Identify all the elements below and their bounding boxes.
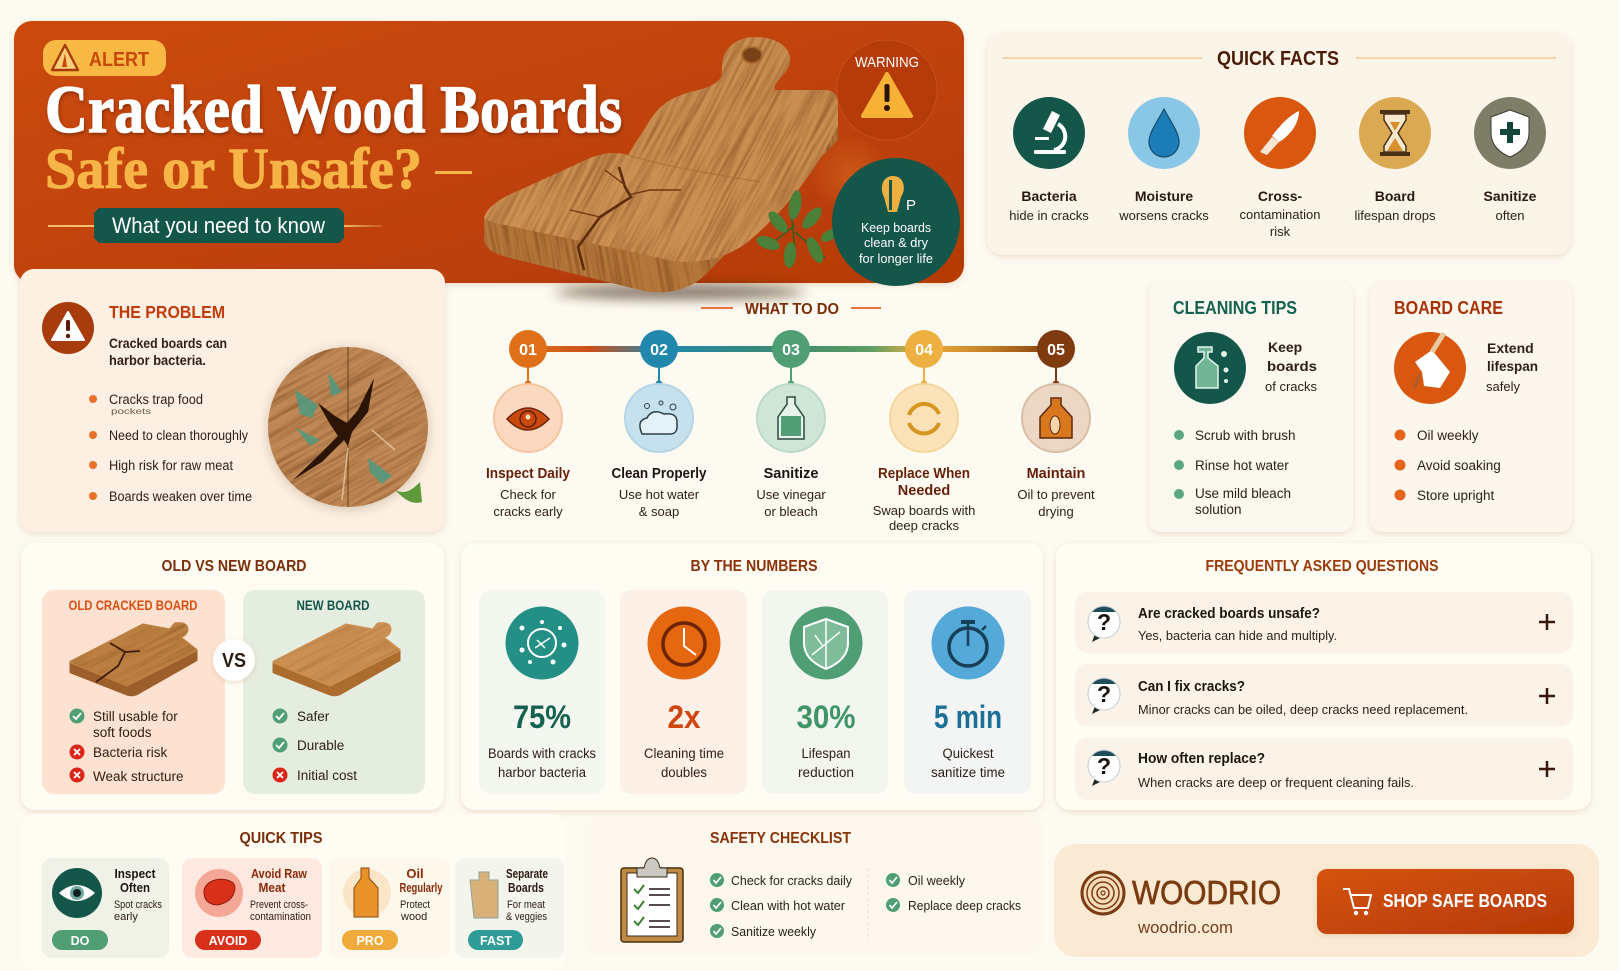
heading: SAFETY CHECKLIST [710, 830, 851, 847]
button: shop safe boards [1317, 869, 1574, 934]
fact: bacteria: hide in cracks [1009, 208, 1089, 223]
step 4 [873, 330, 975, 533]
tip: oil regularly [329, 858, 450, 958]
stat: 5 min [904, 590, 1031, 794]
bullet list: solution [1195, 502, 1242, 517]
faq row 2: Can I fix cracks? [1138, 679, 1245, 695]
tagline [1486, 340, 1538, 394]
bullet list: Store upright [1417, 488, 1495, 503]
step 1: cracks early [493, 504, 563, 519]
step 3: Use vinegar [756, 487, 826, 502]
stat: 5 min: sanitize time [931, 765, 1005, 780]
icon: herb sprig [755, 189, 841, 268]
tip: separate boards [455, 858, 564, 958]
step 1: Check for [500, 487, 556, 502]
tip: separate boards: & veggies [506, 911, 547, 923]
heading: WHAT TO DO [745, 301, 839, 318]
tip: inspect often: DO [71, 934, 90, 948]
illustration: cracked cutting board [484, 37, 838, 308]
panel: frequently asked questions [1056, 543, 1591, 810]
fact: board lifespan: Board [1375, 188, 1415, 204]
brand name: WOODRIO [1132, 874, 1281, 911]
tip badge [832, 158, 960, 286]
tip: separate boards: Separate [506, 866, 548, 881]
icon: spray bottle [1174, 332, 1246, 404]
panel: cleaning tips [1149, 282, 1353, 532]
illustration: cracked round wood with mold [262, 343, 434, 514]
tip badge: for longer life [859, 252, 933, 266]
heading: FREQUENTLY ASKED QUESTIONS [1206, 558, 1438, 575]
step 2: 02 [650, 342, 668, 359]
summary text: Cracked boards can [109, 335, 227, 351]
panel: the problem [18, 269, 448, 536]
hero subtitle question: Safe or Unsafe? [45, 136, 422, 201]
checklist column 1 [710, 873, 852, 939]
warning badge [837, 40, 937, 140]
stat: 5 min: 5 min [934, 699, 1002, 735]
step 3: 03 [782, 342, 800, 359]
step 4: deep cracks [889, 518, 960, 533]
panel: safety checklist [585, 816, 1043, 956]
tagline: Keep [1268, 339, 1302, 355]
fact: cross contamination: Cross- [1258, 188, 1303, 204]
bullet list [1394, 428, 1501, 503]
what you need to know ribbon: What you need to know [112, 213, 325, 238]
bullet list: High risk for raw meat [109, 458, 233, 473]
bullet list: Use mild bleach [1195, 486, 1291, 501]
tagline: safely [1486, 379, 1520, 394]
bullet list: Avoid soaking [1417, 458, 1501, 473]
icon: oil brush [1394, 332, 1466, 404]
stat: 2x: 2x [668, 699, 701, 735]
old board column: Still usable for [93, 709, 178, 724]
step 4: Swap boards with [873, 503, 975, 518]
tip: avoid raw meat: Meat [258, 880, 286, 895]
old board column: soft foods [93, 725, 152, 740]
heading: BOARD CARE [1394, 298, 1503, 318]
fact: bacteria [1009, 97, 1089, 223]
button: shop safe boards: SHOP SAFE BOARDS [1383, 891, 1547, 911]
new board column: Safer [297, 709, 330, 724]
stat: 2x: Cleaning time [644, 746, 724, 761]
faq row 1 [1075, 592, 1573, 653]
checklist column 1: Sanitize weekly [731, 924, 816, 939]
new board column [243, 590, 425, 794]
stat: 30 percent: Lifespan [802, 746, 850, 761]
step 2: & soap [639, 504, 679, 519]
tip: oil regularly: PRO [356, 934, 384, 948]
bullet list: Scrub with brush [1195, 428, 1296, 443]
faq row 2: ? [1097, 681, 1111, 707]
brand name [1132, 874, 1281, 937]
stat: 2x [620, 590, 747, 794]
tip: inspect often: early [114, 911, 138, 923]
hero title: Cracked Wood Boards [45, 71, 622, 147]
tip: avoid raw meat: Avoid Raw [251, 866, 308, 881]
tagline: boards [1267, 358, 1317, 374]
stat: 30 percent: 30% [796, 699, 856, 735]
timeline connector [528, 346, 1056, 352]
step 1: Inspect Daily [486, 466, 570, 482]
panel: quick tips [21, 814, 565, 971]
summary text [109, 335, 227, 368]
checklist column 2: Replace deep cracks [908, 898, 1021, 913]
step 5: drying [1038, 504, 1074, 519]
fact: bacteria: Bacteria [1021, 188, 1077, 204]
bullet list [1174, 428, 1296, 517]
step 2 [612, 330, 706, 519]
tip: oil regularly: Regularly [400, 880, 443, 895]
step 2: Use hot water [619, 487, 700, 502]
heading: QUICK FACTS [1217, 48, 1339, 70]
tip badge: P [906, 197, 916, 214]
vs badge: VS [222, 650, 246, 672]
step 5: Oil to prevent [1017, 487, 1095, 502]
faq row 1: Are cracked boards unsafe? [1138, 606, 1320, 622]
tip: separate boards: Boards [508, 880, 544, 895]
old board column: Bacteria risk [93, 745, 168, 760]
icon: warning triangle [42, 302, 94, 354]
step 4: Needed [898, 483, 950, 499]
faq row 2 [1075, 664, 1573, 726]
faq row 3: ? [1097, 753, 1111, 779]
bullet list [89, 392, 252, 504]
bullet list: Need to clean thoroughly [109, 428, 248, 443]
checklist column 2: Oil weekly [908, 873, 965, 888]
stat: 30 percent: reduction [798, 765, 854, 780]
fact: cross contamination [1240, 97, 1320, 239]
tip: oil regularly: Oil [406, 866, 424, 881]
fact: cross contamination: risk [1270, 224, 1291, 239]
bullet list: Oil weekly [1417, 428, 1479, 443]
old board column: OLD CRACKED BOARD [68, 598, 198, 613]
step 4: 04 [915, 342, 933, 359]
bullet list: pockets [111, 407, 151, 416]
stat: 75 percent [479, 590, 605, 794]
step 5 [1017, 330, 1095, 519]
stat: 5 min: Quickest [942, 746, 994, 761]
faq row 2: Minor cracks can be oiled, deep cracks need replacement. [1138, 702, 1468, 717]
faq row 3: When cracks are deep or frequent cleaning fails. [1138, 775, 1414, 790]
step 3: Sanitize [764, 466, 818, 482]
heading: CLEANING TIPS [1173, 298, 1297, 318]
alert badge [43, 40, 166, 76]
fact: board lifespan: lifespan drops [1355, 208, 1436, 223]
faq row 1: Yes, bacteria can hide and multiply. [1138, 628, 1337, 643]
step 2: Clean Properly [612, 466, 706, 482]
what you need to know ribbon [48, 208, 382, 243]
faq row 1: ? [1097, 609, 1111, 635]
brand name: woodrio.com [1137, 919, 1233, 937]
new board column: NEW BOARD [296, 598, 370, 613]
heading: OLD VS NEW BOARD [162, 558, 306, 575]
panel: quick facts [987, 33, 1571, 255]
faq row 3: How often replace? [1138, 751, 1265, 767]
checklist column 1: Clean with hot water [731, 898, 846, 913]
tip: avoid raw meat [182, 858, 322, 958]
new board column: Initial cost [297, 768, 357, 783]
tagline [1265, 339, 1318, 394]
fact: moisture: worsens cracks [1118, 208, 1209, 223]
panel: by the numbers [461, 543, 1043, 810]
step 1: 01 [519, 342, 537, 359]
tip: inspect often [42, 858, 169, 958]
hero banner [12, 20, 966, 308]
faq row 3 [1075, 738, 1573, 800]
stat: 75 percent: 75% [513, 699, 571, 735]
tagline: Extend [1487, 340, 1534, 356]
vs badge [213, 639, 255, 681]
panel: board care [1370, 282, 1572, 532]
bullet list: Rinse hot water [1195, 458, 1289, 473]
new board column: Durable [297, 738, 344, 753]
tagline: lifespan [1487, 358, 1538, 374]
tip: oil regularly: wood [400, 911, 427, 923]
bullet list: Boards weaken over time [109, 489, 252, 504]
old board column: Weak structure [93, 769, 184, 784]
tagline: of cracks [1265, 379, 1318, 394]
logo: wood rings [1082, 872, 1124, 914]
fact: moisture [1118, 97, 1209, 223]
stat: 75 percent: harbor bacteria [498, 765, 586, 780]
tip badge: Keep boards [861, 221, 931, 235]
step 5: Maintain [1027, 466, 1085, 482]
step 3 [756, 330, 826, 519]
stat: 30 percent [762, 590, 888, 794]
step 1 [486, 330, 570, 519]
warning badge: WARNING [855, 55, 919, 71]
tip: oil regularly: Protect [400, 899, 430, 911]
tip: avoid raw meat: Prevent cross- [250, 899, 308, 911]
tip: inspect often: Spot cracks [114, 899, 162, 911]
old board column [42, 590, 225, 794]
icon: clipboard [621, 858, 683, 942]
fact: sanitize [1474, 97, 1546, 223]
fact: cross contamination: contamination [1240, 207, 1320, 222]
step 4: Replace When [878, 466, 970, 482]
alert badge: ALERT [89, 49, 149, 71]
section: what to do [486, 301, 1095, 533]
stat: 2x: doubles [661, 765, 707, 780]
tip: separate boards: FAST [480, 934, 512, 948]
heading: BY THE NUMBERS [690, 558, 818, 575]
checklist column 2 [886, 873, 1021, 913]
panel: brand and call to action [1054, 844, 1599, 957]
tip: separate boards: For meat [507, 899, 545, 911]
stat: 75 percent: Boards with cracks [488, 746, 596, 761]
fact: board lifespan [1355, 97, 1436, 223]
checklist column 1: Check for cracks daily [731, 873, 852, 888]
step 5: 05 [1047, 342, 1065, 359]
fact: sanitize: often [1496, 208, 1524, 223]
tip: inspect often: Often [120, 880, 150, 895]
fact: moisture: Moisture [1135, 188, 1193, 204]
panel: old vs new board [18, 542, 446, 814]
tip: avoid raw meat: contamination [250, 911, 311, 923]
tip: avoid raw meat: AVOID [209, 934, 247, 948]
summary text: harbor bacteria. [109, 352, 206, 368]
tip badge: clean & dry [864, 236, 929, 250]
bullet list: Cracks trap food [109, 392, 203, 407]
step 3: or bleach [764, 504, 818, 519]
heading: THE PROBLEM [109, 302, 225, 322]
tip: inspect often: Inspect [114, 866, 156, 881]
fact: sanitize: Sanitize [1484, 188, 1537, 204]
heading: QUICK TIPS [240, 830, 323, 847]
